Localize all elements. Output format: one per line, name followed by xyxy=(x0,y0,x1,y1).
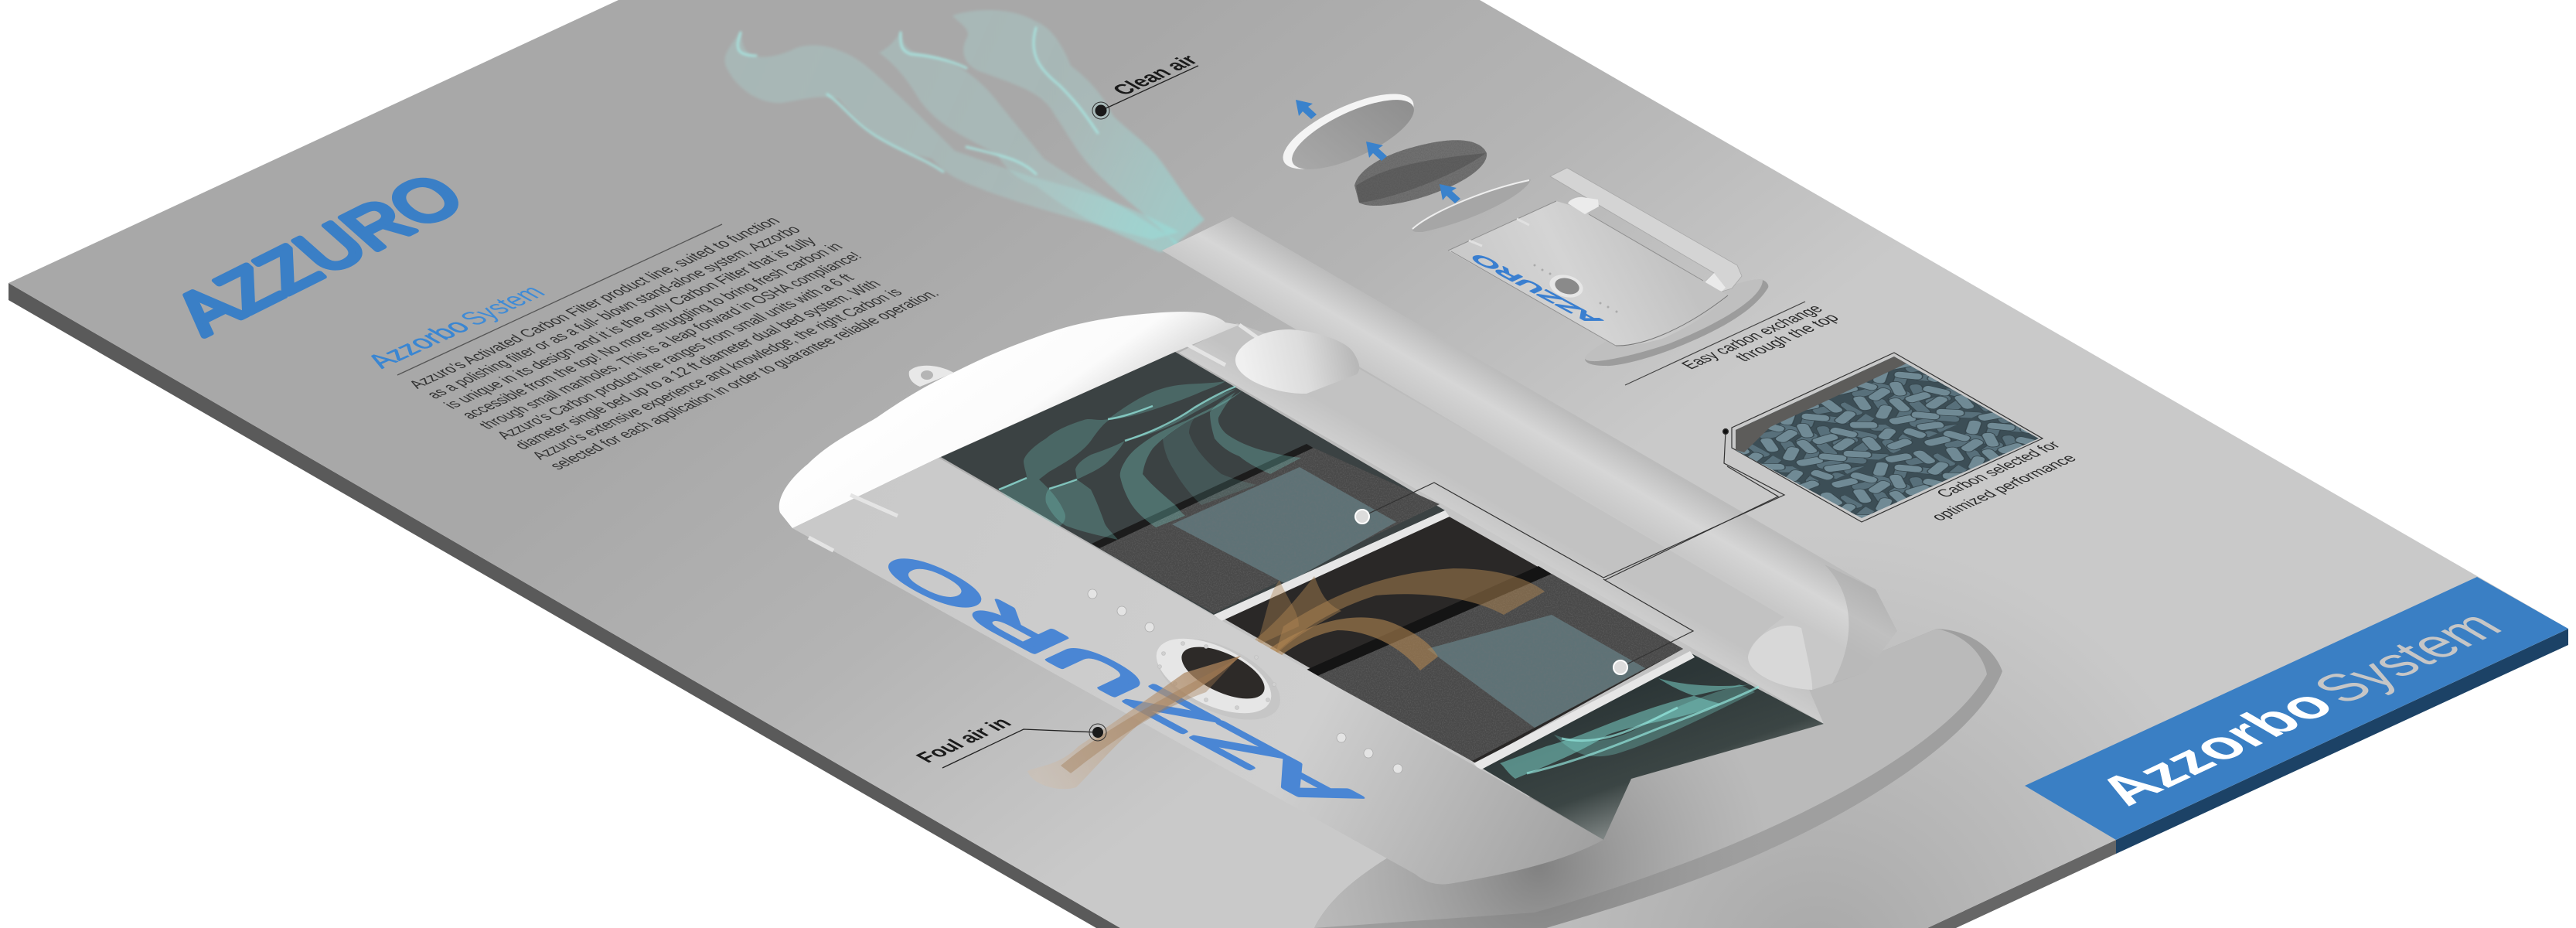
upper dark gap xyxy=(1092,444,1322,552)
body text block: diameter single bed up to a 12 ft diameter dual bed system. With xyxy=(510,278,885,452)
banner: blue corner strip xyxy=(2025,577,2568,840)
bottom chamber xyxy=(1483,653,1824,840)
base plinth of big tank xyxy=(1299,619,2010,928)
photo inset: carbon pellets xyxy=(1724,348,2049,526)
tank interior cutaway xyxy=(941,352,1824,840)
tank front shell xyxy=(792,458,1603,885)
banner title: Azzorbo xyxy=(2081,681,2349,814)
arrow: lid lifting xyxy=(1296,100,1317,119)
tank dome xyxy=(779,312,1239,528)
pipe connector to tank xyxy=(1235,329,1359,394)
foul air rising through lower chamber xyxy=(1248,568,1545,670)
tank rim tabs xyxy=(809,325,1263,551)
tank back shell strip xyxy=(1179,323,1824,724)
caption: easy carbon exchange xyxy=(1625,302,1843,385)
tank studs xyxy=(1088,589,1402,773)
banner title: System xyxy=(2298,602,2516,711)
heading: Azzorbo System: System xyxy=(452,281,552,329)
banner title xyxy=(2081,602,2516,814)
label: Foul air in xyxy=(911,715,1106,768)
body text block: accessible from the top! No more struggling to bring fresh carbon in xyxy=(457,240,847,421)
exploded view: carbon basket xyxy=(1354,140,1487,206)
arrow: basket lifting xyxy=(1366,142,1387,161)
tank logo: AZZURO: AZZURO xyxy=(866,548,1371,817)
lower chamber xyxy=(1224,514,1683,763)
body text block xyxy=(404,206,943,473)
upper divider xyxy=(1214,510,1450,621)
exploded view: lower disk xyxy=(1412,179,1531,232)
body text block: Azzuro’s Activated Carbon Filter product line, suited to function xyxy=(404,214,784,391)
lower carbon block xyxy=(1427,615,1645,728)
body text block: through small manholes. This is a leap forward in OSHA compliance! xyxy=(475,250,866,432)
clean air plumes above stack xyxy=(725,10,1205,252)
small tank: base plate xyxy=(1585,279,1768,366)
lower dark gap xyxy=(1307,566,1554,678)
label: Clean air: Clean air xyxy=(1107,52,1203,98)
clean air inside upper chamber xyxy=(999,381,1301,540)
upper chamber xyxy=(941,352,1445,615)
label: Clean air xyxy=(1092,52,1203,119)
lower divider xyxy=(1474,651,1695,770)
caption: easy carbon exchange: through the top xyxy=(1730,311,1843,363)
tank lifting lug xyxy=(909,366,954,387)
leader lines to pellet inset xyxy=(1362,428,1784,667)
divider under heading xyxy=(397,224,722,375)
caption: carbon selected: Carbon selected for xyxy=(1932,438,2064,500)
body text block: Azzuro’s extensive experience and knowledge, the right Carbon is xyxy=(527,285,907,462)
marker: lower carbon bed xyxy=(1613,660,1627,674)
upper carbon block xyxy=(1172,467,1396,584)
heading: Azzorbo System xyxy=(359,281,552,372)
upper fabric bed xyxy=(1099,448,1440,613)
arrow: disk lifting xyxy=(1440,184,1460,203)
exploded view: top lid xyxy=(1273,79,1423,184)
small tank: inlet hole xyxy=(1534,264,1617,312)
brand logo: AZZURO: AZZURO xyxy=(156,162,479,346)
outlet pipe xyxy=(1162,217,1897,690)
body text block: is unique in its design and it is the only Carbon Filter that is fully xyxy=(440,234,820,411)
clean air in bottom chamber xyxy=(1500,678,1759,779)
label: Foul air in: Foul air in xyxy=(911,715,1017,766)
body text block: Azzuro’s Carbon product line ranges from small units with a 6 ft xyxy=(492,271,858,442)
caption: carbon selected: optimized performance xyxy=(1927,452,2080,523)
lower fabric bed xyxy=(1317,574,1683,761)
heading: Azzorbo System: Azzorbo xyxy=(359,315,477,372)
marker: upper carbon bed xyxy=(1355,510,1369,524)
small tank: logo: AZZURO xyxy=(1466,252,1606,326)
small tank: pipe xyxy=(1550,168,1742,292)
inlet flange xyxy=(1144,622,1293,736)
small tank: body xyxy=(1448,197,1728,346)
foul air entering xyxy=(1027,656,1241,789)
body text block: as a polishing filter or as a full- blown stand-alone system. Azzorbo xyxy=(422,223,805,401)
body text block: selected for each application in order to guarantee reliable operation. xyxy=(545,287,943,473)
caption: easy carbon exchange: Easy carbon exchange xyxy=(1677,302,1827,371)
